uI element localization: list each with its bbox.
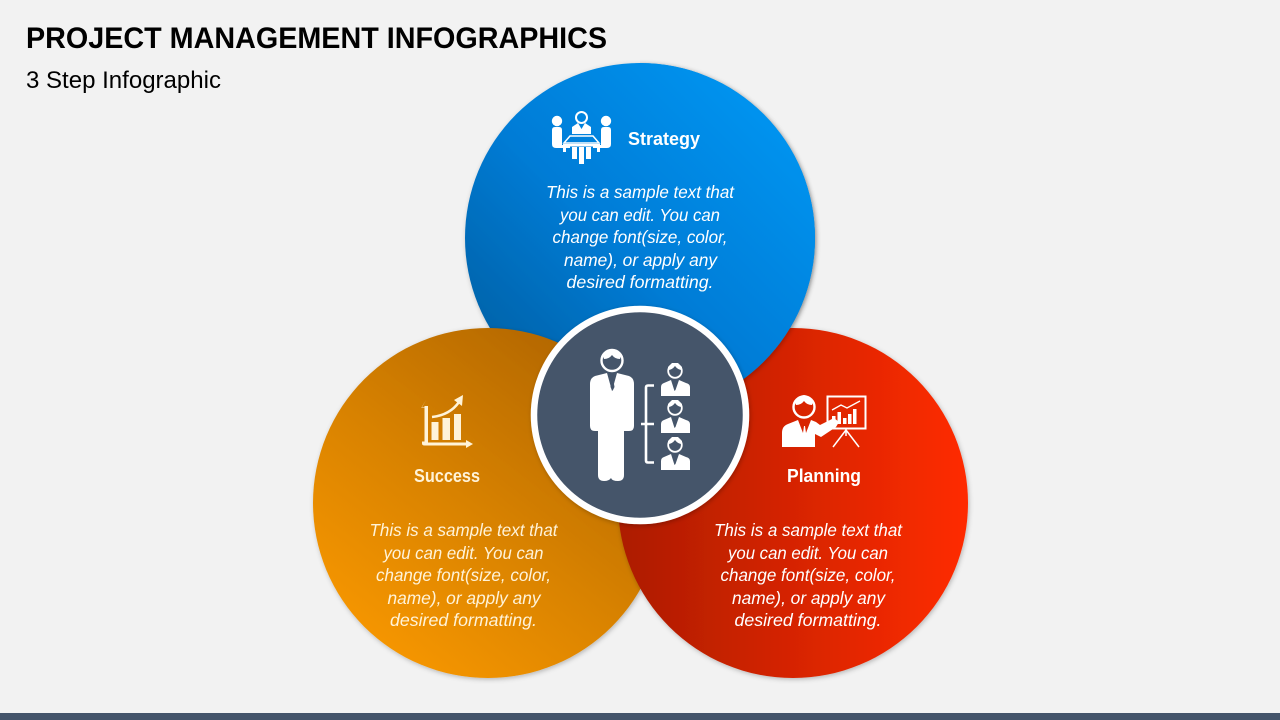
text block: planning: change font(size, color, — [720, 565, 896, 585]
text block: success: This is a sample text that — [370, 520, 559, 540]
subtitle: 3 Step Infographic — [26, 67, 221, 94]
text block: strategy: you can edit. You can — [559, 205, 720, 225]
circle: success — [313, 328, 663, 678]
text block: success — [370, 520, 559, 630]
text block: success: desired formatting. — [390, 610, 537, 630]
footer bar — [0, 713, 1280, 720]
circle: strategy overlap over planning — [640, 62, 818, 383]
text block: success: you can edit. You can — [383, 543, 544, 563]
panel: strategy content — [546, 112, 735, 292]
panel: success content — [370, 395, 559, 630]
icon: team member 2 — [661, 400, 690, 433]
icon: presenter with board — [782, 395, 866, 447]
text block: planning — [714, 520, 903, 630]
title: PROJECT MANAGEMENT INFOGRAPHICS — [26, 22, 607, 55]
icon: growth chart — [422, 395, 473, 448]
icon: meeting table — [552, 112, 611, 164]
text block: success: name), or apply any — [388, 588, 542, 608]
circle: strategy — [465, 63, 815, 413]
text block: planning: desired formatting. — [734, 610, 882, 630]
panel: central hub — [534, 309, 746, 521]
circle: planning — [618, 328, 968, 678]
icon: bracket — [641, 386, 654, 462]
text block: strategy: name), or apply any — [564, 250, 718, 270]
heading: strategy: Strategy — [628, 129, 700, 149]
text block: strategy: desired formatting. — [566, 272, 714, 292]
text block: planning: This is a sample text that — [714, 520, 903, 540]
heading: planning: Planning — [787, 466, 861, 486]
text block: strategy: change font(size, color, — [552, 227, 728, 247]
panel: planning content — [714, 395, 903, 630]
icon: manager figure — [590, 350, 634, 481]
heading: success: Success — [414, 466, 480, 486]
icon: team member 3 — [661, 437, 690, 470]
text block: planning: name), or apply any — [732, 588, 886, 608]
icon: team member 1 — [661, 363, 690, 396]
text block: strategy: This is a sample text that — [546, 182, 735, 202]
text block: planning: you can edit. You can — [727, 543, 888, 563]
text block: success: change font(size, color, — [376, 565, 551, 585]
central circle — [534, 309, 746, 521]
text block: strategy — [546, 182, 735, 292]
